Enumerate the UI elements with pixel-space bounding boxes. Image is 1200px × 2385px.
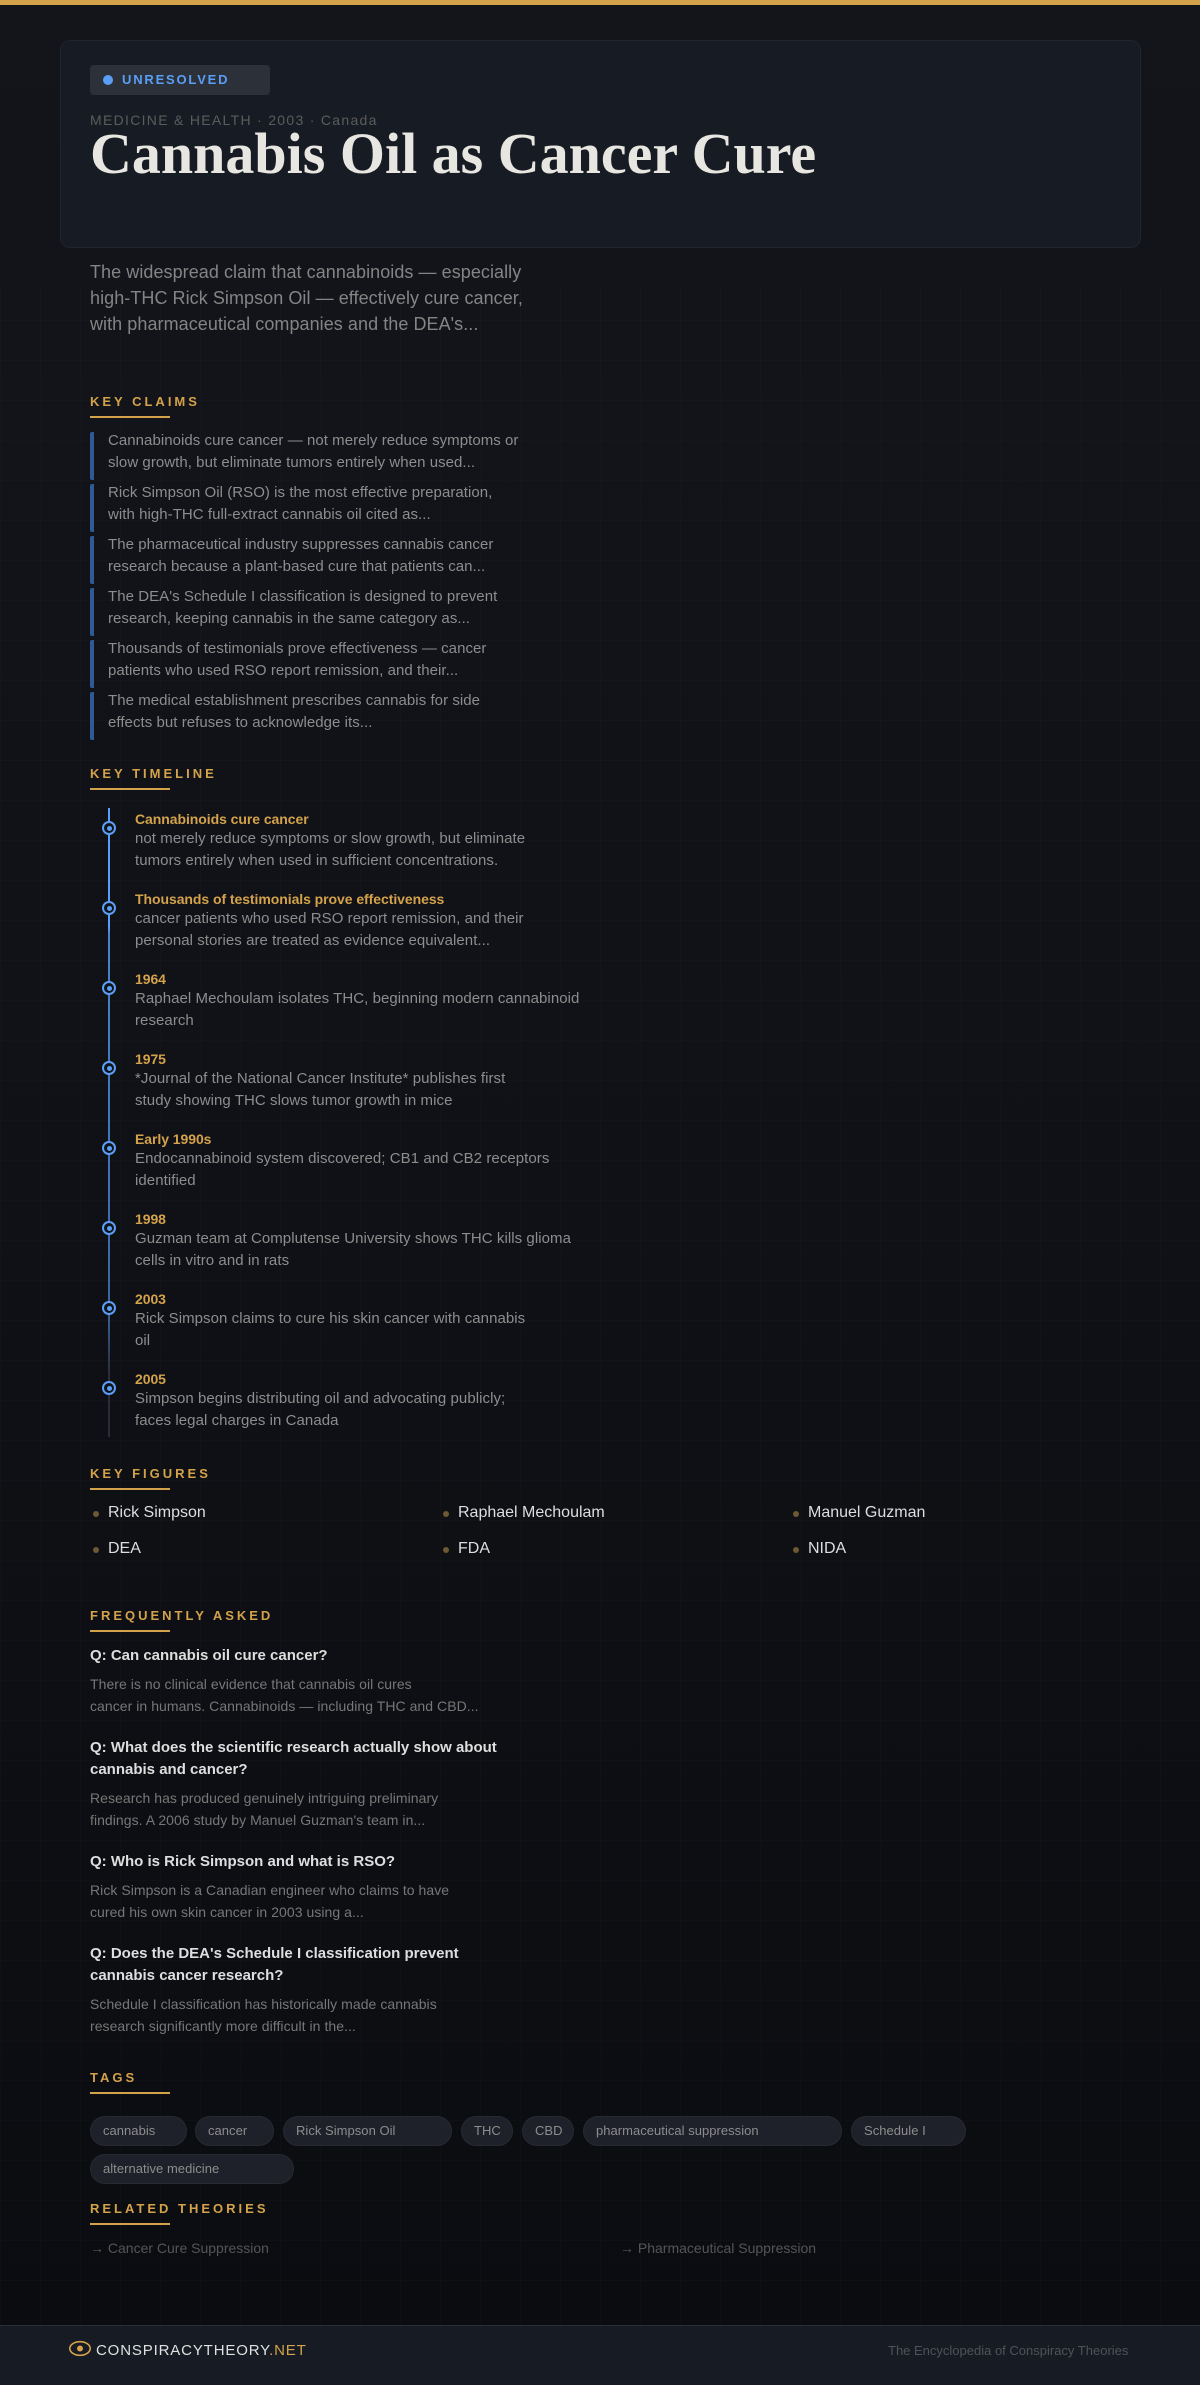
answer 4: research significantly more difficult in the... bbox=[90, 2018, 356, 2034]
claim 5: Thousands of testimonials prove effectiveness — cancer bbox=[108, 640, 486, 657]
figure: NIDA: NIDA bbox=[808, 1540, 846, 1557]
heading: frequently asked: FREQUENTLY ASKED bbox=[90, 1608, 273, 1623]
timeline entry: 1964: 1964 bbox=[135, 971, 166, 987]
tag: Schedule I bbox=[864, 2123, 926, 2138]
timeline entry: cannabinoids cure cancer bbox=[102, 811, 525, 869]
figure: FDA bbox=[443, 1540, 490, 1557]
panel: key claims list bbox=[90, 432, 518, 740]
tag bbox=[90, 2154, 294, 2184]
timeline entry: early 1990s: Early 1990s bbox=[135, 1131, 211, 1147]
panel: key figures grid bbox=[93, 1504, 925, 1557]
answer 3 bbox=[90, 1882, 449, 1920]
intro description: with pharmaceutical companies and the DEA's... bbox=[90, 314, 478, 334]
timeline entry: testimonials: personal stories are treated as evidence equivalent... bbox=[135, 932, 490, 949]
answer 1: cancer in humans. Cannabinoids — including THC and CBD... bbox=[90, 1698, 479, 1714]
tag: THC bbox=[474, 2123, 501, 2138]
timeline entry: 2005: faces legal charges in Canada bbox=[135, 1412, 339, 1429]
tag bbox=[195, 2116, 274, 2146]
icon: eye logo bbox=[69, 2340, 91, 2356]
claim 6: effects but refuses to acknowledge its... bbox=[108, 714, 372, 731]
tag: Rick Simpson Oil bbox=[296, 2123, 395, 2138]
timeline entry: 2003 bbox=[102, 1291, 525, 1349]
tag bbox=[283, 2116, 452, 2146]
timeline entry: testimonials bbox=[102, 891, 524, 949]
claim 3: research because a plant-based cure that patients can... bbox=[108, 558, 485, 575]
claim 2: with high-THC full-extract cannabis oil cited as... bbox=[108, 506, 431, 523]
claim 3 bbox=[90, 536, 530, 584]
title: Cannabis Oil as Cancer Cure bbox=[90, 121, 816, 186]
timeline entry: 2005: Simpson begins distributing oil and advocating publicly; bbox=[135, 1390, 505, 1407]
status badge: unresolved bbox=[90, 65, 270, 95]
tag: CBD bbox=[535, 2123, 563, 2138]
tag bbox=[851, 2116, 966, 2146]
answer 2: Research has produced genuinely intriguing preliminary bbox=[90, 1790, 438, 1806]
heading: tags: TAGS bbox=[90, 2070, 137, 2085]
intro description: The widespread claim that cannabinoids — especially bbox=[90, 262, 521, 282]
question 2 bbox=[90, 1739, 497, 1778]
answer 1: There is no clinical evidence that cannabis oil cures bbox=[90, 1676, 412, 1692]
related theory link: → Pharmaceutical Suppression bbox=[620, 2240, 816, 2256]
timeline entry: 1998: Guzman team at Complutense University shows THC kills glioma bbox=[135, 1230, 571, 1247]
timeline entry: cannabinoids cure cancer: Cannabinoids cure cancer bbox=[135, 811, 309, 827]
answer 3: cured his own skin cancer in 2003 using a... bbox=[90, 1904, 364, 1920]
category and date meta line: MEDICINE & HEALTH · 2003 · Canada bbox=[90, 112, 378, 128]
timeline entry: 1964 bbox=[102, 971, 579, 1029]
icon: status dot bbox=[103, 75, 113, 85]
timeline entry: early 1990s bbox=[102, 1131, 549, 1189]
claim 1: slow growth, but eliminate tumors entirely when used... bbox=[108, 454, 475, 471]
timeline spine bbox=[108, 808, 110, 1437]
timeline entry: 2003: oil bbox=[135, 1332, 150, 1349]
question 4: Q: Does the DEA's Schedule I classification prevent bbox=[90, 1945, 459, 1962]
timeline bbox=[102, 808, 579, 1437]
claim 2 bbox=[90, 484, 530, 532]
claim 5 bbox=[90, 640, 530, 688]
intro description: high-THC Rick Simpson Oil — effectively cure cancer, bbox=[90, 288, 523, 308]
heading: key timeline: KEY TIMELINE bbox=[90, 766, 217, 781]
timeline entry: 2005: 2005 bbox=[135, 1371, 166, 1387]
answer 4: Schedule I classification has historically made cannabis bbox=[90, 1996, 437, 2012]
question 2: Q: What does the scientific research actually show about bbox=[90, 1739, 497, 1756]
question 2: cannabis and cancer? bbox=[90, 1761, 248, 1778]
timeline entry: 1998: cells in vitro and in rats bbox=[135, 1252, 289, 1269]
timeline entry: 1975: *Journal of the National Cancer Institute* publishes first bbox=[135, 1070, 505, 1087]
claim 6: The medical establishment prescribes cannabis for side bbox=[108, 692, 480, 709]
heading: key claims: KEY CLAIMS bbox=[90, 394, 200, 409]
figure: Raphael Mechoulam: Raphael Mechoulam bbox=[458, 1504, 605, 1521]
timeline entry: early 1990s: Endocannabinoid system discovered; CB1 and CB2 receptors bbox=[135, 1150, 549, 1167]
question 3: Q: Who is Rick Simpson and what is RSO? bbox=[90, 1853, 395, 1870]
tag bbox=[583, 2116, 842, 2146]
claim 1: Cannabinoids cure cancer — not merely reduce symptoms or bbox=[108, 432, 518, 449]
figure: Rick Simpson: Rick Simpson bbox=[108, 1504, 206, 1521]
claim 5: patients who used RSO report remission, and their... bbox=[108, 662, 458, 679]
answer 1 bbox=[90, 1676, 479, 1714]
figure: FDA: FDA bbox=[458, 1540, 490, 1557]
timeline entry: 2003: 2003 bbox=[135, 1291, 166, 1307]
panel: header bbox=[60, 40, 1141, 248]
tag: cannabis bbox=[103, 2123, 155, 2138]
timeline entry: cannabinoids cure cancer: tumors entirely when used in sufficient concentrations. bbox=[135, 852, 498, 869]
figure: DEA bbox=[93, 1540, 141, 1557]
timeline entry: 1964: research bbox=[135, 1012, 194, 1029]
tag: pharmaceutical suppression bbox=[596, 2123, 759, 2138]
timeline entry: early 1990s: identified bbox=[135, 1172, 196, 1189]
claim 4 bbox=[90, 588, 530, 636]
timeline entry: cannabinoids cure cancer: not merely reduce symptoms or slow growth, but eliminate bbox=[135, 830, 525, 847]
site logo text: CONSPIRACYTHEORY.NET bbox=[96, 2342, 307, 2359]
question 1: Q: Can cannabis oil cure cancer? bbox=[90, 1647, 328, 1664]
tag bbox=[90, 2116, 187, 2146]
tag bbox=[461, 2116, 513, 2146]
timeline entry: 1998 bbox=[102, 1211, 571, 1269]
tag bbox=[522, 2116, 574, 2146]
tag: cancer bbox=[208, 2123, 247, 2138]
answer 2 bbox=[90, 1790, 438, 1828]
claim 1 bbox=[90, 432, 530, 480]
timeline entry: 2005 bbox=[102, 1371, 505, 1429]
claim 3: The pharmaceutical industry suppresses cannabis cancer bbox=[108, 536, 493, 553]
timeline entry: testimonials: Thousands of testimonials prove effectiveness bbox=[135, 891, 444, 907]
timeline entry: 1998: 1998 bbox=[135, 1211, 166, 1227]
timeline entry: 1975: study showing THC slows tumor growth in mice bbox=[135, 1092, 452, 1109]
badge label: UNRESOLVED bbox=[122, 72, 229, 87]
footer bbox=[0, 2325, 1200, 2385]
timeline entry: 1975 bbox=[102, 1051, 506, 1109]
figure: DEA: DEA bbox=[108, 1540, 141, 1557]
timeline entry: 1975: 1975 bbox=[135, 1051, 166, 1067]
answer 3: Rick Simpson is a Canadian engineer who claims to have bbox=[90, 1882, 449, 1898]
tag: alternative medicine bbox=[103, 2161, 219, 2176]
answer 2: findings. A 2006 study by Manuel Guzman's team in... bbox=[90, 1812, 425, 1828]
related theory link: → Cancer Cure Suppression bbox=[90, 2240, 269, 2256]
claim 4: research, keeping cannabis in the same category as... bbox=[108, 610, 470, 627]
question 4 bbox=[90, 1945, 459, 1984]
footer tagline: The Encyclopedia of Conspiracy Theories bbox=[888, 2343, 1128, 2358]
intro description bbox=[90, 262, 523, 334]
heading: related theories: RELATED THEORIES bbox=[90, 2201, 268, 2216]
timeline entry: testimonials: cancer patients who used RSO report remission, and their bbox=[135, 910, 524, 927]
panel: tags bbox=[90, 2116, 966, 2184]
claim 4: The DEA's Schedule I classification is designed to prevent bbox=[108, 588, 497, 605]
answer 4 bbox=[90, 1996, 437, 2034]
claim 6 bbox=[90, 692, 530, 740]
claim 2: Rick Simpson Oil (RSO) is the most effective preparation, bbox=[108, 484, 492, 501]
figure: Manuel Guzman: Manuel Guzman bbox=[808, 1504, 925, 1521]
timeline entry: 1964: Raphael Mechoulam isolates THC, beginning modern cannabinoid bbox=[135, 990, 579, 1007]
heading: key figures: KEY FIGURES bbox=[90, 1466, 211, 1481]
question 4: cannabis cancer research? bbox=[90, 1967, 283, 1984]
timeline entry: 2003: Rick Simpson claims to cure his skin cancer with cannabis bbox=[135, 1310, 525, 1327]
